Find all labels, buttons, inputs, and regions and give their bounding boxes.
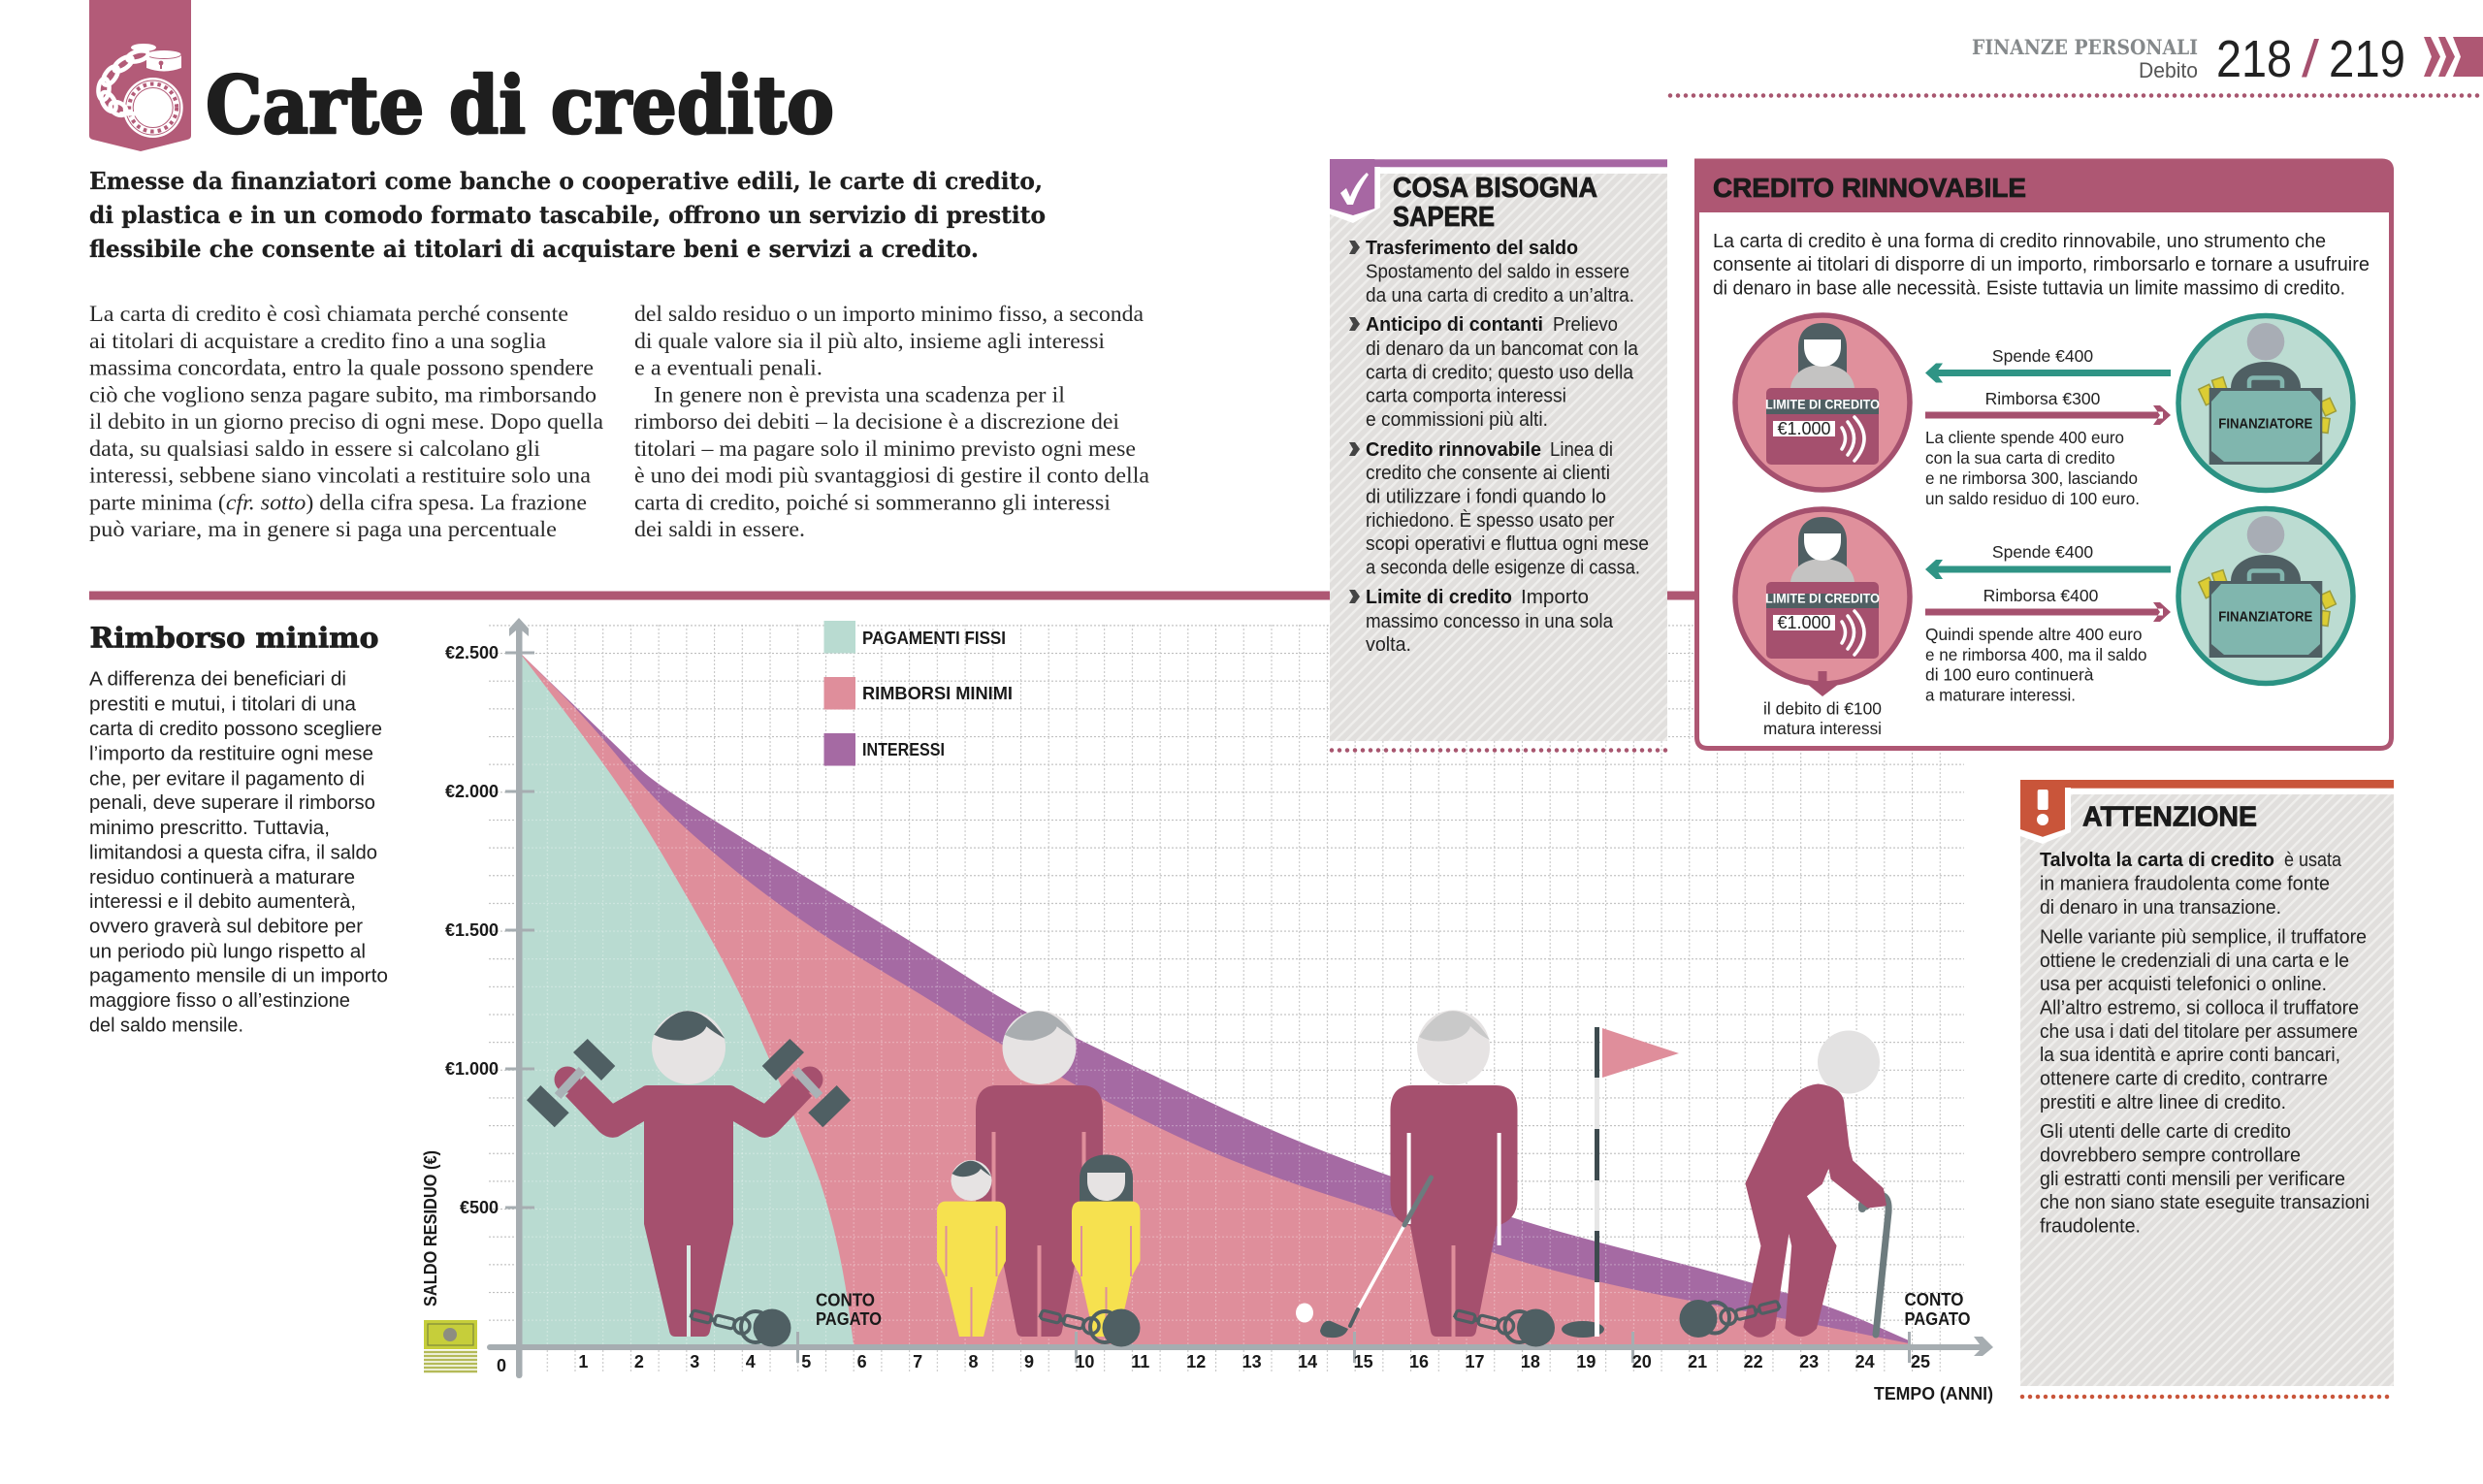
arrows and text row 2: e ne rimborsa 400, ma il saldo (1925, 645, 2147, 664)
text block: usa per acquisti telefonici o online. (2040, 973, 2327, 995)
y axis labels: €1.000 (445, 1059, 499, 1079)
body text column 2: In genere non è prevista una scadenza per il (654, 382, 1065, 407)
text block: Talvolta la carta di credito (2040, 849, 2274, 871)
body text column 2: del saldo residuo o un importo minimo fisso, a seconda (634, 302, 1145, 327)
conto pagato label 2: PAGATO (1905, 1309, 1971, 1329)
text block: rimborso minimo: maggiore fisso o all’estinzione (89, 989, 350, 1012)
text block: dovrebbero sempre controllare (2040, 1145, 2301, 1167)
x axis labels: 13 (1242, 1352, 1262, 1371)
text block: rimborso minimo: carta di credito possono scegliere (89, 718, 382, 740)
item: credito rinnovabile: a seconda delle esigenze di cassa. (1366, 557, 1640, 578)
figure: girl (1072, 1154, 1141, 1337)
body text column 2: rimborso dei debiti – la decisione è a discrezione dei (634, 409, 1119, 435)
y axis with arrow (505, 618, 534, 1378)
golf ball (1296, 1304, 1313, 1323)
arrows and text row 1: La cliente spende 400 euro (1925, 428, 2124, 447)
running head and page numbers (1972, 30, 2483, 88)
text block: la sua identità e aprire conti bancari, (2040, 1044, 2340, 1066)
arrows and text row 2: a maturare interessi. (1925, 685, 2076, 704)
arrows and text row 1: un saldo residuo di 100 euro. (1925, 489, 2140, 508)
title: Carte di credito (206, 60, 834, 152)
text block: rimborso minimo: pagamento mensile di un importo (89, 965, 388, 987)
conto pagato label 1: PAGATO (816, 1309, 882, 1329)
icon: chevrons (2424, 37, 2483, 77)
x axis labels: 10 (1075, 1352, 1094, 1371)
item: anticipo di contanti: Anticipo di contanti (1366, 313, 1543, 336)
x axis labels: 15 (1354, 1352, 1373, 1371)
conto pagato label 2 (1905, 1290, 1971, 1329)
heading: SAPERE (1393, 202, 1495, 233)
item: credito rinnovabile: Credito rinnovabile (1366, 438, 1541, 461)
item: credito rinnovabile: di utilizzare i fondi quando lo (1366, 485, 1606, 508)
arrows and text row 1: Rimborsa €300 (1985, 389, 2101, 408)
body text column 1: il debito in un giorno preciso di ogni mese. Dopo quella (89, 409, 604, 435)
arrows and text row 1: Spende €400 (1992, 346, 2093, 366)
golf club shaft overlay (1404, 1178, 1432, 1225)
x axis labels: 2 (634, 1352, 644, 1371)
panel: attenzione (2020, 780, 2394, 1386)
body text column 1: ciò che vogliono senza pagare subito, ma rimborsando (89, 382, 597, 407)
item: anticipo di contanti: Prelievo (1553, 313, 1618, 336)
conto pagato label 1 (816, 1290, 882, 1329)
x axis labels: 22 (1744, 1352, 1763, 1371)
legend: INTERESSI (862, 740, 945, 759)
text block: prestiti e altre linee di credito. (2040, 1091, 2286, 1113)
panel: cosa bisogna sapere (1330, 159, 1667, 741)
item: trasferimento del saldo (1349, 237, 1634, 306)
body text column 2: e a eventuali penali. (634, 355, 822, 380)
item: anticipo di contanti: carta comporta interessi (1366, 384, 1566, 407)
title banner with chain icon (89, 0, 191, 151)
legend: RIMBORSI MINIMI (862, 684, 1013, 703)
diagram: customer 2: €1.000 (1777, 613, 1831, 632)
icon: ball and chain (98, 44, 183, 138)
text block: rimborso minimo: l’importo da restituire ogni mese (89, 743, 373, 765)
body text column 1: parte minima (cfr. sotto) della cifra spesa. La frazione (89, 491, 587, 516)
ball and chain 1 (690, 1309, 791, 1346)
x axis labels: 24 (1855, 1352, 1875, 1371)
body text column 2: dei saldi in essere. (634, 517, 805, 542)
arrows and text row 1 (1925, 346, 2171, 508)
figure: boy (937, 1160, 1006, 1337)
diagram: customer 1: LIMITE DI CREDITO (1765, 398, 1880, 412)
text block: Nelle variante più semplice, il truffatore (2040, 926, 2367, 949)
text block: di denaro in una transazione. (2040, 896, 2281, 919)
icon: warning tab (2020, 780, 2065, 837)
item: limite di credito: massimo concesso in una sola (1366, 610, 1614, 632)
x axis labels: 16 (1409, 1352, 1429, 1371)
arrows and text row 2: di 100 euro continuerà (1925, 665, 2094, 685)
body text column 1: interessi, sebbene siano vincolati a restituire solo una (89, 464, 592, 489)
text block: rimborso minimo: prestiti e mutui, i titolari di una (89, 693, 357, 715)
x axis labels: 20 (1632, 1352, 1652, 1371)
text block: in maniera fraudolenta come fonte (2040, 873, 2330, 895)
chart: saldo residuo nel tempo (421, 618, 1993, 1403)
item: limite di credito (1349, 586, 1614, 656)
x axis labels: 21 (1688, 1352, 1707, 1371)
running head and page numbers: Debito (2139, 58, 2198, 82)
running head and page numbers: 218 (2216, 30, 2292, 88)
ball and chain 2 (1039, 1309, 1141, 1346)
figure: older golfer (1391, 1011, 1517, 1337)
item: limite di credito: Limite di credito (1366, 586, 1512, 608)
item: trasferimento del saldo: da una carta di credito a un’altra. (1366, 284, 1634, 306)
text block: rimborso minimo: ovvero graverà sul debitore per (89, 916, 363, 938)
legend (824, 621, 1013, 766)
icon: stack of money (424, 1320, 477, 1371)
text block: ottiene le credenziali di una carta e le (2040, 950, 2349, 972)
text block: rimborso minimo: del saldo mensile. (89, 1014, 243, 1036)
chart area: pagamenti fissi (519, 652, 854, 1344)
x axis labels: 11 (1131, 1352, 1149, 1371)
item: anticipo di contanti: e commissioni più alti. (1366, 408, 1548, 431)
caption: debt: matura interessi (1763, 719, 1882, 738)
x axis labels: 0 (497, 1356, 506, 1375)
figure: young man with dumbbells (527, 1011, 851, 1337)
ball and chain 4 (1680, 1300, 1781, 1338)
figure: middle aged parent (976, 1011, 1103, 1337)
text block: rimborso minimo: limitandosi a questa cifra, il saldo (89, 842, 377, 864)
item: credito rinnovabile: credito che consente ai clienti (1366, 462, 1610, 484)
text block: rimborso minimo: penali, deve superare il rimborso (89, 791, 375, 814)
x axis labels: 25 (1911, 1352, 1930, 1371)
item: credito rinnovabile: Linea di (1550, 438, 1613, 461)
x axis labels: 17 (1465, 1352, 1485, 1371)
x axis labels: 3 (690, 1352, 699, 1371)
panel: credito rinnovabile (1694, 159, 2394, 749)
body text column 2 (634, 302, 1150, 542)
text block: è usata (2284, 849, 2342, 871)
text block: che usa i dati del titolare per assumere (2040, 1020, 2358, 1043)
ball and chain 3 (1453, 1309, 1555, 1346)
y axis labels: €1.500 (445, 920, 499, 940)
x axis labels: 14 (1298, 1352, 1317, 1371)
text block: rimborso minimo: un periodo più lungo rispetto al (89, 940, 366, 962)
arrows and text row 2: Spende €400 (1992, 542, 2093, 562)
text block (2040, 849, 2370, 1238)
x axis labels: 5 (801, 1352, 811, 1371)
item: anticipo di contanti: carta di credito; questo uso della (1366, 361, 1634, 384)
conto pagato label 2: CONTO (1905, 1290, 1963, 1309)
intro text (89, 167, 1046, 263)
text block: ottenere carte di credito, contrarre (2040, 1068, 2328, 1090)
running head and page numbers: FINANZE PERSONALI (1972, 35, 2198, 59)
intro text: consente ai titolari di disporre di un importo, rimborsarlo e tornare a usufruire (1713, 253, 2370, 275)
running head and page numbers: / (2302, 30, 2319, 88)
x axis with arrow (487, 1332, 1993, 1363)
text block: rimborso minimo: minimo prescritto. Tuttavia, (89, 817, 330, 839)
chart area: interessi (519, 652, 1909, 1344)
item: anticipo di contanti (1349, 313, 1639, 431)
y axis labels (445, 643, 499, 1217)
text block: rimborso minimo: A differenza dei beneficiari di (89, 668, 346, 691)
running head and page numbers: 219 (2329, 30, 2405, 88)
caption: debt: il debito di €100 (1763, 699, 1882, 719)
text block: rimborso minimo (89, 668, 388, 1036)
diagram: lender 2: FINANZIATORE (2218, 610, 2313, 626)
x axis labels (497, 1352, 1930, 1375)
y axis labels: €500 (460, 1198, 499, 1217)
x axis labels: 8 (968, 1352, 979, 1371)
body text column 2: titolari – ma pagare solo il minimo previsto ogni mese (634, 436, 1136, 462)
text block: che non siano state eseguite transazioni (2040, 1191, 2370, 1213)
x axis labels: 7 (913, 1352, 922, 1371)
x axis labels: 4 (746, 1352, 756, 1371)
y axis labels: €2.000 (445, 782, 499, 801)
item: trasferimento del saldo: Trasferimento del saldo (1366, 237, 1578, 259)
conto pagato label 1: CONTO (816, 1290, 875, 1309)
item: trasferimento del saldo: Spostamento del saldo in essere (1366, 260, 1629, 283)
heading: CREDITO RINNOVABILE (1713, 173, 2026, 203)
chart area: rimborsi minimi (519, 652, 1909, 1344)
text block: fraudolente. (2040, 1215, 2141, 1238)
golf flag and hole (1562, 1027, 1679, 1338)
body text column 1: La carta di credito è così chiamata perché consente (89, 302, 568, 327)
arrows and text row 2: Quindi spende altre 400 euro (1925, 625, 2142, 644)
intro text: flessibile che consente ai titolari di acquistare beni e servizi a credito. (89, 235, 979, 263)
legend: PAGAMENTI FISSI (862, 629, 1006, 648)
diagram: customer 1 (1735, 315, 1910, 490)
item: credito rinnovabile: scopi operativi e fluttua ogni mese (1366, 532, 1649, 555)
axis title: saldo residuo: SALDO RESIDUO (€) (421, 1150, 440, 1307)
intro text: La carta di credito è una forma di credito rinnovabile, uno strumento che (1713, 230, 2326, 252)
figure: elderly person with cane (1745, 1030, 1888, 1336)
body text column 2: è uno dei modi più svantaggiosi di gestire il conto della (634, 464, 1150, 489)
heading: ATTENZIONE (2082, 802, 2257, 833)
icon: check mark tab (1330, 159, 1374, 215)
body text column 2: carta di credito, poiché si sommeranno gli interessi (634, 491, 1111, 516)
y axis labels: €2.500 (445, 643, 499, 662)
arrow: debt accrues (1807, 671, 1839, 696)
item: limite di credito: Importo (1521, 586, 1589, 608)
caption: debt (1763, 699, 1882, 738)
x axis labels: 9 (1024, 1352, 1034, 1371)
intro text: di denaro in base alle necessità. Esiste tuttavia un limite massimo di credito. (1713, 277, 2345, 299)
text block: rimborso minimo: interessi e il debito aumenterà, (89, 890, 356, 913)
x axis labels: 1 (578, 1352, 588, 1371)
item: credito rinnovabile (1349, 438, 1649, 578)
body text column 1: massima concordata, entro la quale possono spendere (89, 355, 594, 380)
arrows and text row 1: con la sua carta di credito (1925, 448, 2114, 468)
body text column 1 (89, 302, 604, 542)
x axis labels: 23 (1799, 1352, 1819, 1371)
text block: rimborso minimo: che, per evitare il pagamento di (89, 767, 365, 790)
text block: Gli utenti delle carte di credito (2040, 1120, 2291, 1143)
x axis labels: 19 (1576, 1352, 1596, 1371)
x axis labels: 6 (857, 1352, 867, 1371)
text block: gli estratti conti mensili per verificare (2040, 1168, 2345, 1190)
item: limite di credito: volta. (1366, 633, 1411, 656)
heading: COSA BISOGNA (1393, 173, 1597, 204)
intro text: Emesse da finanziatori come banche o cooperative edili, le carte di credito, (89, 167, 1043, 195)
diagram: lender 1: FINANZIATORE (2218, 417, 2313, 433)
item: credito rinnovabile: richiedono. È spesso usato per (1366, 509, 1615, 532)
x axis labels: 12 (1186, 1352, 1206, 1371)
intro text: di plastica e in un comodo formato tascabile, offrono un servizio di prestito (89, 201, 1046, 229)
body text column 1: data, su qualsiasi saldo in essere si calcolano gli (89, 436, 540, 462)
section heading: rimborso minimo: Rimborso minimo (89, 622, 378, 655)
text block: rimborso minimo: residuo continuerà a maturare (89, 866, 355, 888)
diagram: lender 1 (2178, 316, 2353, 491)
body text column 1: può variare, ma in genere si paga una percentuale (89, 517, 557, 542)
arrows and text row 2 (1925, 542, 2171, 704)
x axis labels: 18 (1521, 1352, 1540, 1371)
diagram: customer 2 (1735, 509, 1910, 696)
arrows and text row 2: Rimborsa €400 (1983, 586, 2099, 605)
diagram: customer 1: €1.000 (1777, 419, 1831, 438)
heading (1393, 173, 1597, 233)
item: anticipo di contanti: di denaro da un bancomat con la (1366, 338, 1639, 360)
text block: All’altro estremo, si colloca il truffatore (2040, 997, 2359, 1019)
axis title: tempo: TEMPO (ANNI) (1874, 1384, 1993, 1403)
intro text (1713, 230, 2370, 299)
diagram: customer 2: LIMITE DI CREDITO (1765, 592, 1880, 606)
body text column 2: di quale valore sia il più alto, insieme agli interessi (634, 329, 1105, 354)
arrows and text row 1: e ne rimborsa 300, lasciando (1925, 468, 2138, 488)
golf club (1320, 1225, 1404, 1338)
body text column 1: ai titolari di acquistare a credito fino a una soglia (89, 329, 547, 354)
diagram: lender 2 (2178, 508, 2353, 683)
